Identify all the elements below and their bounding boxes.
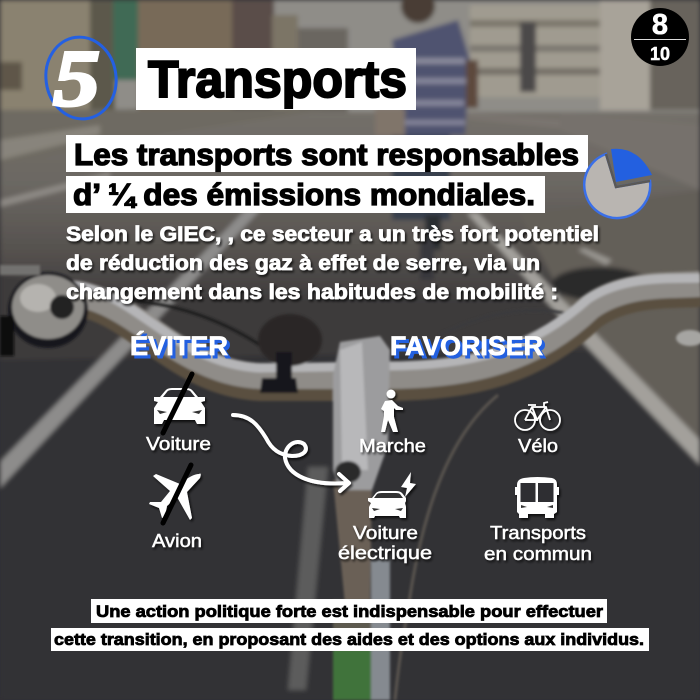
progress badge 8/10 (631, 8, 689, 66)
intro paragraph: changement dans les habitudes de mobilité : (66, 281, 558, 304)
label: transports en commun (484, 522, 592, 564)
label: transports en commun: en commun (484, 543, 592, 564)
label: transports en commun: Transports (490, 522, 586, 543)
label: voiture électrique: électrique (338, 542, 432, 563)
pie chart: one quarter (584, 149, 652, 218)
icon: crossed-out car (154, 374, 205, 433)
heading: share of global emissions: Les transports sont responsables (74, 137, 579, 172)
intro paragraph: de réduction des gaz à effet de serre, via un (66, 252, 540, 275)
bell grip (8, 272, 88, 348)
conclusion callout: Une action politique forte est indispensable pour effectuer (96, 602, 603, 621)
label: voiture électrique: Voiture (353, 522, 418, 543)
intro paragraph: Selon le GIEC, , ce secteur a un très fort potentiel (66, 223, 599, 246)
progress badge 8/10: 10 (650, 44, 670, 64)
title: Transports (148, 51, 407, 109)
heading: share of global emissions (66, 135, 588, 213)
handlebar (55, 290, 700, 384)
icon: crossed-out plane (149, 465, 201, 523)
heading: éviter: ÉVITER (130, 330, 228, 361)
label: marche: Marche (359, 435, 426, 456)
icon: walking person (381, 390, 403, 432)
arrow: from avoid to favour (233, 415, 349, 491)
label: voiture: Voiture (146, 433, 211, 454)
icon: electric car (368, 472, 416, 518)
label: avion: Avion (152, 530, 202, 551)
heading: éviter: ÉVITER (133, 333, 231, 364)
brake mount (258, 314, 322, 366)
label: vélo: Vélo (518, 435, 558, 456)
icon: bus (515, 477, 559, 518)
heading: share of global emissions: d’ ¼ des émissions mondiales. (73, 177, 535, 212)
progress badge 8/10: 8 (652, 9, 668, 41)
number badge: 5 in hand-drawn circle: 5 (53, 35, 100, 123)
heading: favoriser: FAVORISER (393, 334, 546, 364)
number badge: 5 in hand-drawn circle (41, 33, 121, 123)
bike frame (333, 480, 372, 605)
label: voiture électrique (338, 522, 432, 563)
heading: favoriser: FAVORISER (390, 331, 543, 361)
intro paragraph (66, 223, 599, 304)
conclusion callout: cette transition, en proposant des aides et des options aux individus. (54, 630, 644, 649)
stem (333, 336, 390, 490)
conclusion callout (51, 599, 649, 651)
icon: bicycle (515, 402, 560, 430)
person (401, 0, 435, 23)
